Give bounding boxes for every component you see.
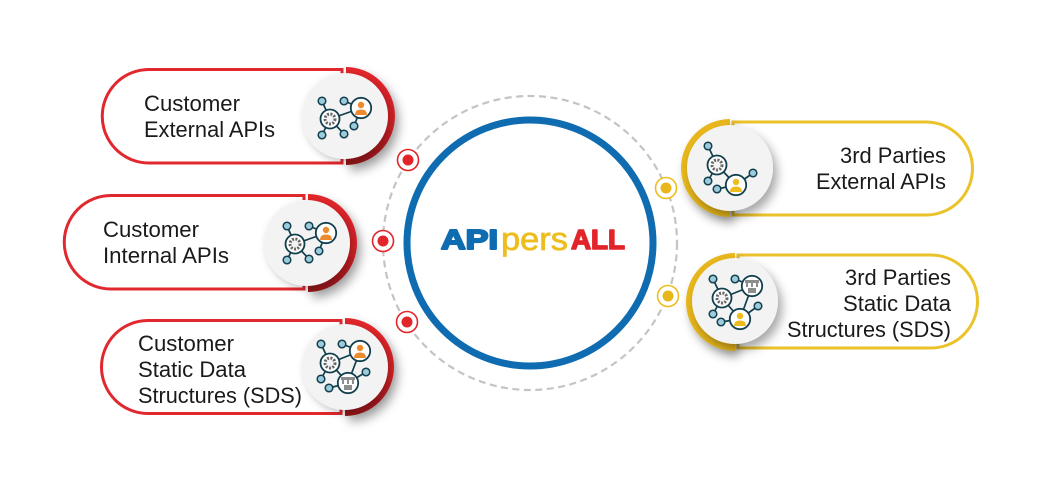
label: Customer Static Data Structures (SDS) (138, 331, 302, 408)
dashed orbit circle (383, 96, 677, 390)
icon: gear and user network (283, 222, 336, 264)
logo: APIpersALL: API (441, 224, 498, 255)
marker: red bottom (396, 312, 418, 332)
label: Customer Static Data Structures (SDS): Static Data (138, 357, 247, 382)
main blue ring (407, 120, 653, 366)
panel: Customer External APIs (102, 67, 395, 165)
panel: Customer Internal APIs (64, 194, 357, 292)
marker: red top (398, 150, 418, 170)
marker: red middle (372, 230, 394, 252)
label: Customer Internal APIs: Internal APIs (103, 243, 229, 268)
logo: APIpersALL: pers (501, 221, 568, 257)
label: Customer External APIs (144, 91, 275, 142)
label: Customer Static Data Structures (SDS): Structures (SDS) (138, 383, 302, 408)
icon: gear and user network (704, 142, 757, 195)
panel: 3rd Parties External APIs (681, 119, 972, 217)
label: 3rd Parties Static Data Structures (SDS) (787, 265, 952, 342)
icon: gear, data and user network (709, 275, 762, 329)
label: 3rd Parties Static Data Structures (SDS): Structures (SDS) (787, 317, 951, 342)
panel: 3rd Parties Static Data Structures (686, 253, 978, 351)
label: Customer External APIs: External APIs (144, 117, 275, 142)
panel: Customer Static Data Structures (102, 318, 394, 416)
label: Customer Internal APIs (103, 217, 229, 268)
icon: gear and user network (318, 97, 371, 139)
label: 3rd Parties Static Data Structures (SDS): Static Data (843, 291, 952, 316)
logo: APIpersALL: ALL (571, 224, 625, 255)
label: Customer External APIs: Customer (144, 91, 240, 116)
icon: gear, user and data network (317, 340, 370, 393)
marker: yellow top (656, 178, 676, 198)
label: 3rd Parties Static Data Structures (SDS): 3rd Parties (845, 265, 951, 290)
label: 3rd Parties External APIs: 3rd Parties (840, 143, 946, 168)
label: 3rd Parties External APIs (816, 143, 946, 194)
label: 3rd Parties External APIs: External APIs (816, 169, 946, 194)
logo: APIpersALL (441, 221, 625, 257)
label: Customer Internal APIs: Customer (103, 217, 199, 242)
label: Customer Static Data Structures (SDS): Customer (138, 331, 234, 356)
marker: yellow bottom (658, 286, 678, 306)
